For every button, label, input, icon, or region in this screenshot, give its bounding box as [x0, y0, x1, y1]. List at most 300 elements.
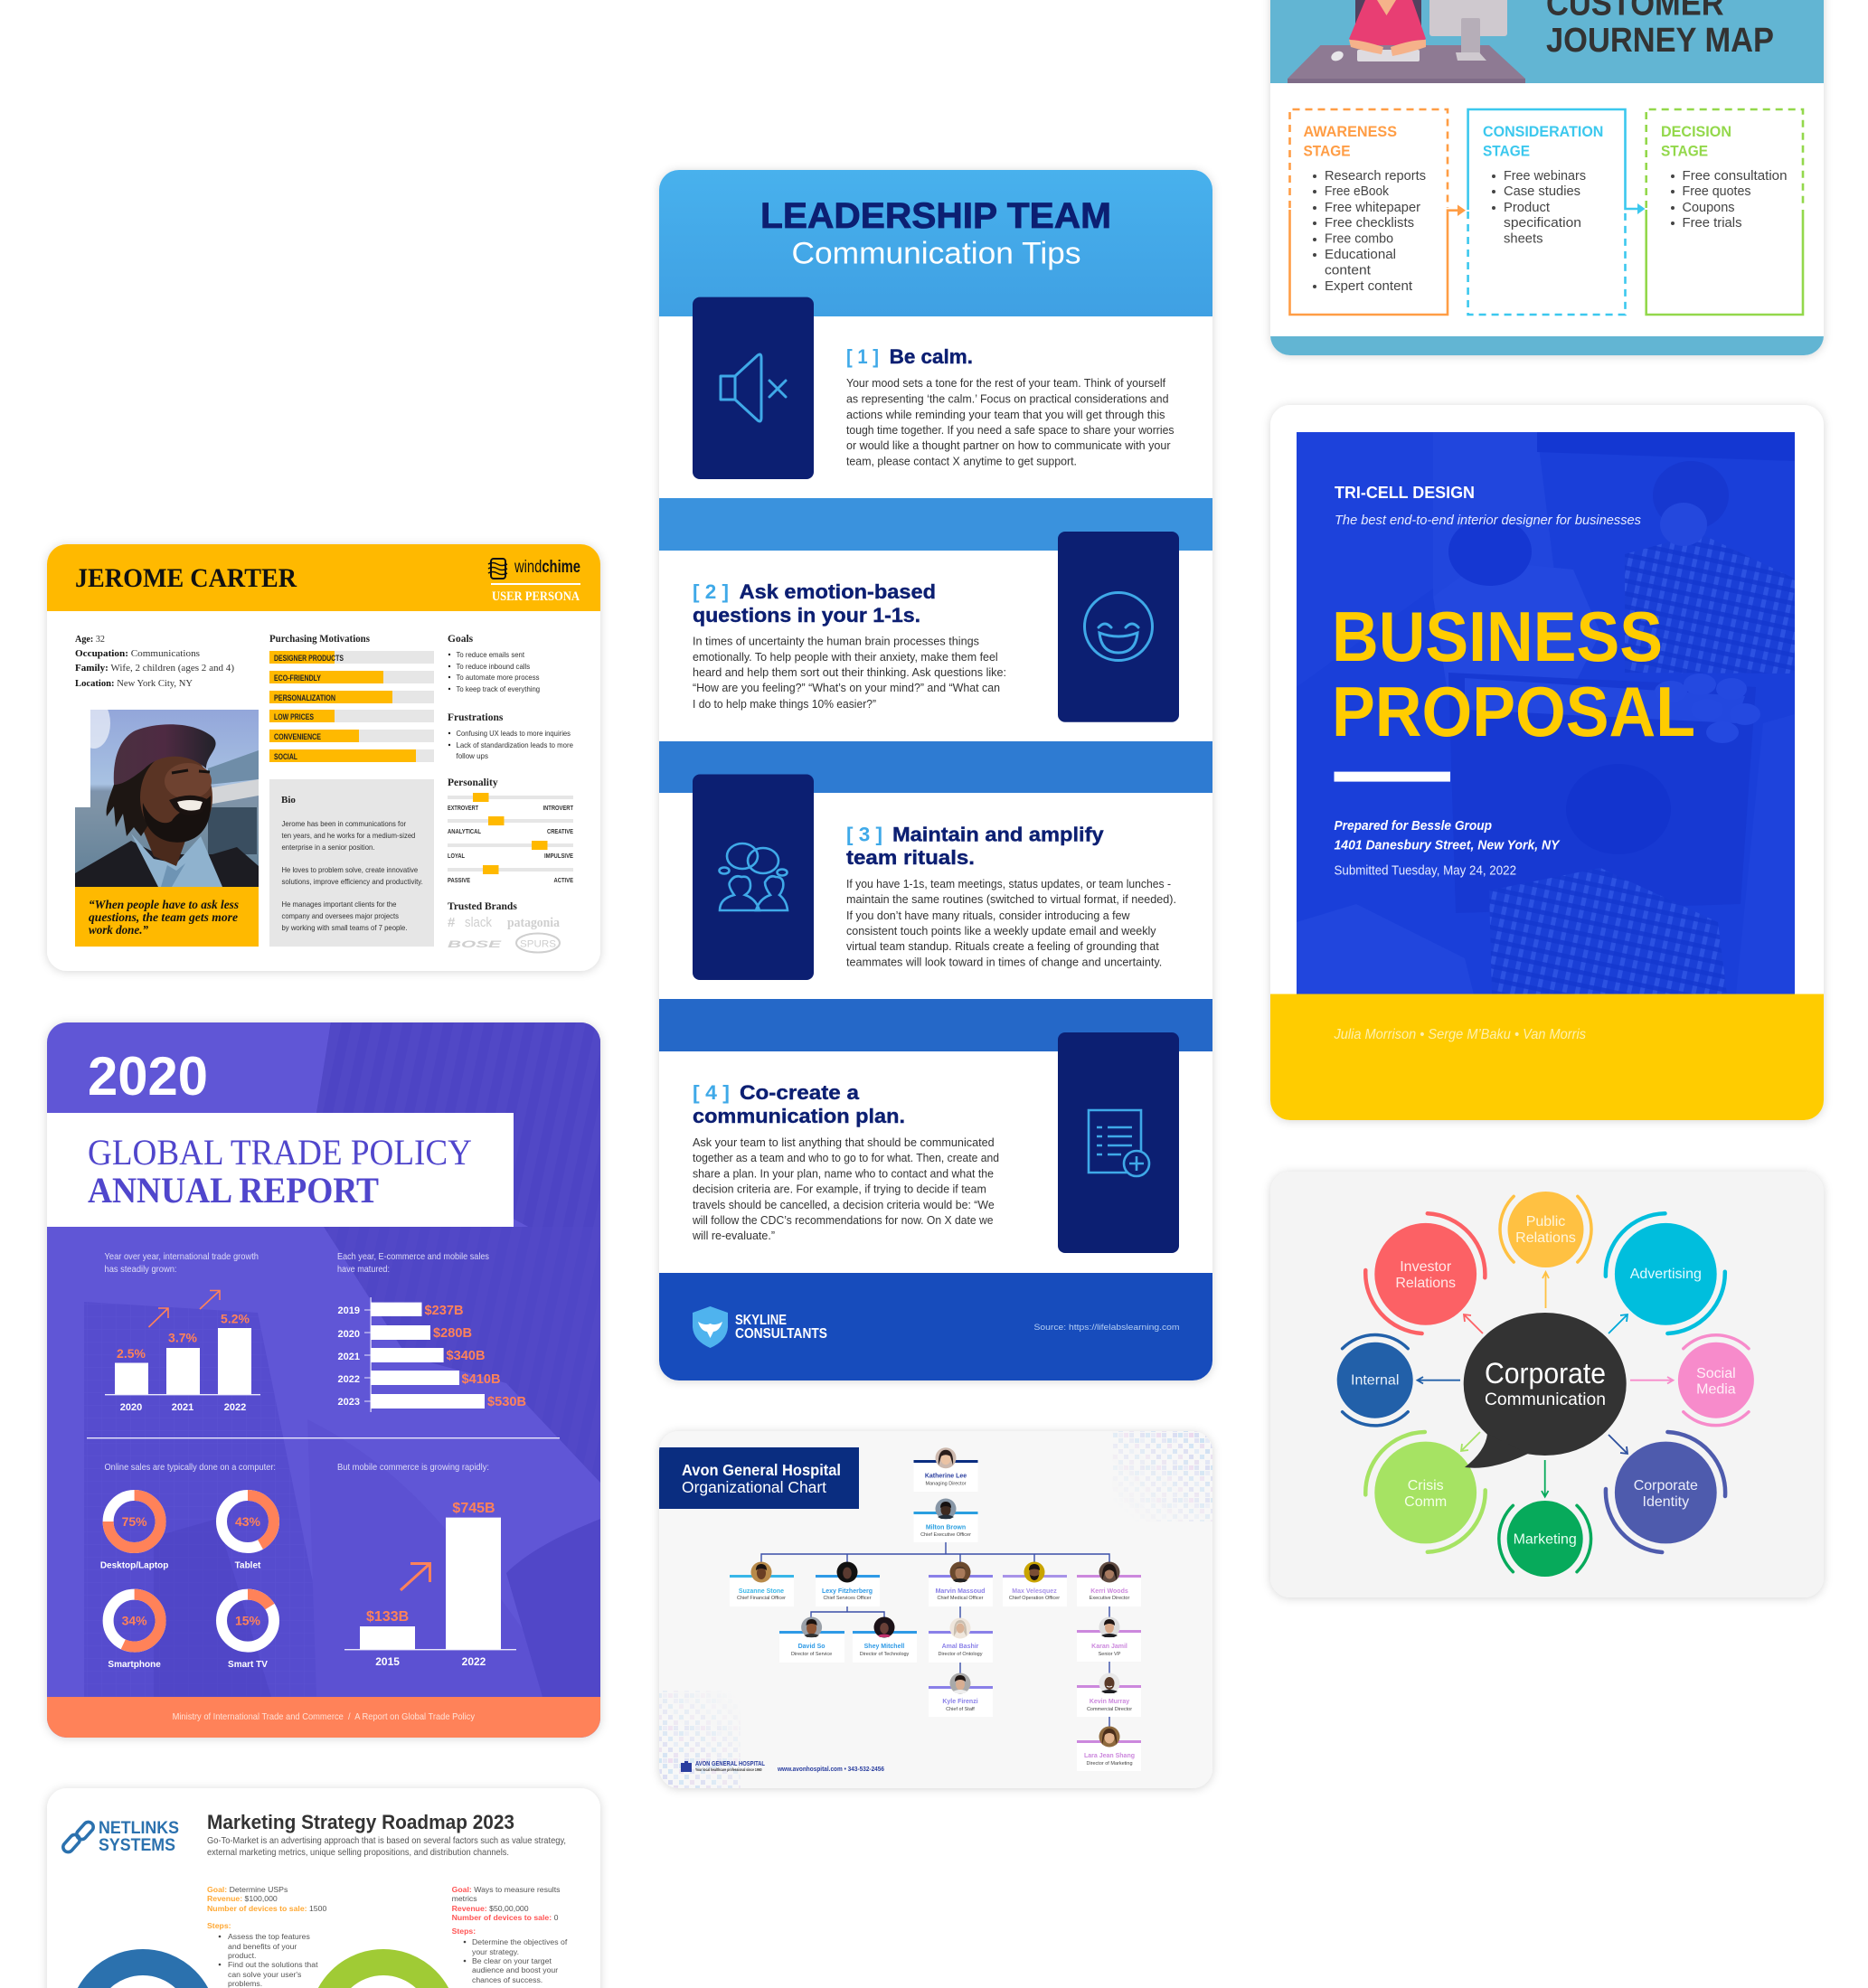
ecommerce horizontal bars: 2023 [338, 1397, 360, 1408]
center speech bubble [1464, 1313, 1627, 1468]
decision stage box: DECISION [1661, 123, 1731, 140]
report title [88, 1132, 472, 1211]
tip 3 icon: people talking [693, 774, 814, 980]
bio panel: solutions, improve efficiency and productivity. [282, 877, 423, 886]
background buildings [84, 1022, 600, 1697]
demographics text: Occupation: Communications [75, 648, 200, 659]
windchime logo [488, 558, 580, 585]
ecommerce horizontal bars [338, 1297, 526, 1412]
person card: Suzanne Stone: Suzanne Stone [739, 1588, 784, 1595]
awareness stage box: content [1325, 264, 1371, 278]
person card: Max Velesquez [1003, 1562, 1067, 1606]
org chart title: Organizational Chart [682, 1478, 826, 1496]
online sales caption: Online sales are typically done on a computer: [105, 1462, 276, 1473]
title: LEADERSHIP TEAM [760, 196, 1111, 236]
mobile commerce bar chart: 2022 [462, 1655, 486, 1668]
trade growth bar chart [105, 1291, 260, 1413]
growth arrows [148, 1291, 220, 1327]
arrows from center to nodes [1418, 1272, 1673, 1497]
report footer [47, 1697, 600, 1738]
person card: Marvin Massoud: Chief Medical Officer [938, 1596, 984, 1601]
trade growth bar chart: 3.7% [168, 1331, 198, 1345]
tip 2 text [693, 580, 1006, 711]
purchasing motivations chart: PERSONALIZATION [274, 693, 335, 702]
panel: customer journey map [1270, 0, 1824, 356]
mobile commerce bar chart: 2015 [375, 1655, 400, 1668]
org chart title: Avon General Hospital [682, 1461, 841, 1479]
roadmap column: measure results [452, 1885, 568, 1984]
bio panel: Bio [281, 795, 296, 806]
ecommerce caption: have matured: [337, 1264, 390, 1275]
decision stage box [1646, 109, 1803, 315]
trade growth caption [105, 1251, 259, 1275]
roadmap column: measure results: metrics [452, 1894, 477, 1903]
goals list [448, 634, 540, 693]
person card: David So [779, 1616, 844, 1663]
ecommerce horizontal bars: $237B [425, 1303, 464, 1318]
roadmap description: external marketing metrics, unique selling propositions, and distribution channels. [207, 1847, 509, 1858]
tip 3 text: If you have 1-1s, team meetings, status updates, or team lunches - [846, 878, 1171, 890]
person card: Kevin Murray: Commercial Director [1087, 1707, 1132, 1712]
consideration stage box: specification [1504, 216, 1581, 231]
prepared for details: Prepared for Bessle Group [1335, 819, 1492, 834]
tip 3 text: teammates will look toward in times of change and uncertainty. [846, 956, 1162, 969]
consideration stage box: Free webinars [1504, 169, 1586, 184]
person card: Suzanne Stone: Chief Financial Officer [737, 1596, 786, 1601]
hat [114, 724, 216, 785]
node: public relations: Public [1526, 1214, 1565, 1230]
person card: Milton Brown: Milton Brown [926, 1525, 966, 1531]
personality sliders: LOYAL [448, 852, 465, 860]
title band [659, 1447, 859, 1509]
tip 3 text: maintain the same routines (switched to virtual format, if needed). [846, 893, 1176, 906]
node: corporate identity: Identity [1643, 1494, 1689, 1510]
roadmap column: determine USPs: and benefits of your [228, 1942, 297, 1951]
purchasing motivations chart: DESIGNER PRODUCTS [274, 654, 344, 663]
user persona label: USER PERSONA [492, 589, 580, 604]
donut: smartphone [108, 1595, 161, 1670]
report title: GLOBAL TRADE POLICY [88, 1132, 472, 1173]
awareness stage box: STAGE [1304, 143, 1351, 160]
donut: smartphone: Smartphone [108, 1660, 161, 1670]
node: marketing: Marketing [1514, 1532, 1577, 1548]
person card: Karan Jamil: Senior VP [1099, 1652, 1121, 1657]
tip 4 text [692, 1081, 999, 1242]
awareness stage box: Expert content [1325, 279, 1412, 294]
tagline: The best end-to-end interior designer for businesses [1335, 513, 1641, 528]
quote box [75, 887, 259, 947]
netlinks logo: NETLINKS [99, 1819, 179, 1838]
mobile growth arrow [401, 1564, 430, 1590]
frustrations list: Lack of standardization leads to more [456, 740, 573, 749]
consideration stage box: CONSIDERATION [1483, 123, 1603, 140]
trusted brands: SPURS [520, 938, 556, 949]
ecommerce horizontal bars: 2019 [338, 1305, 360, 1316]
tip 1 icon: muted speaker [693, 297, 814, 479]
decision stage box: Free quotes [1682, 184, 1750, 199]
panel: business proposal [1270, 405, 1824, 1121]
person card: Max Velesquez: Chief Operation Officer [1009, 1596, 1060, 1601]
tip 2 text: “How are you feeling?” “What’s on your mind?” and “What can [693, 682, 1000, 694]
tip 2 icon: smiling face [1058, 532, 1179, 722]
personality sliders: EXTROVERT [448, 804, 478, 812]
yellow footer band [1270, 994, 1824, 1121]
roadmap column: measure results: your strategy. [472, 1947, 519, 1956]
roadmap column: measure results: Goal: Ways to measure results [452, 1885, 561, 1894]
goals list: Goals [448, 634, 474, 645]
proposal title [1332, 597, 1695, 751]
person card: Lara Jean Shang [1077, 1727, 1141, 1771]
node: corporate identity: Corporate [1634, 1478, 1698, 1493]
title band [47, 1113, 514, 1227]
person card: Suzanne Stone [730, 1562, 794, 1606]
mobile commerce bar chart: $133B [366, 1609, 409, 1625]
tip 4 text: Co-create a [740, 1081, 860, 1104]
subtitle: Communication Tips [792, 237, 1081, 271]
bio panel: company and oversees major projects [282, 911, 399, 920]
donut: desktop/laptop: 75% [122, 1514, 147, 1529]
donut: smartphone: 34% [122, 1614, 147, 1628]
roadmap column: determine USPs: problems. [228, 1979, 262, 1988]
header band [1270, 0, 1824, 83]
tip 1 text: or would like a thought partner on how to communicate with your [846, 439, 1170, 452]
illustration: person at desk [1288, 0, 1525, 83]
neck [144, 826, 185, 866]
hospital logo and contact: www.avonhospital.com • 343-532-2456 [777, 1767, 884, 1773]
purchasing motivations chart: Purchasing Motivations [269, 634, 370, 645]
donut: smart TV [222, 1595, 274, 1670]
person card: Karan Jamil: Karan Jamil [1091, 1644, 1127, 1650]
trusted brands [448, 901, 560, 953]
frustrations list: Confusing UX leads to more inquiries [456, 729, 571, 738]
roadmap description [207, 1835, 566, 1858]
panel: leadership team communication tips [659, 170, 1212, 1381]
roadmap column: determine USPs: Assess the top features [228, 1932, 310, 1941]
node: investor relations: Relations [1395, 1276, 1456, 1291]
hospital logo and contact: Your local healthcare professional since 1960 [695, 1767, 762, 1772]
roadmap column: determine USPs: Goal: Determine USPs [207, 1885, 288, 1894]
tip 3 text: team rituals. [846, 846, 975, 869]
frustrations list [448, 712, 573, 760]
person card: Kerri Woods: Executive Director [1090, 1596, 1129, 1601]
node: advertising [1606, 1213, 1725, 1333]
person card: Kerri Woods: Kerri Woods [1090, 1588, 1128, 1595]
mobile commerce bar chart: $745B [452, 1501, 495, 1516]
roadmap column: measure results: Number of devices to sale: 0 [452, 1913, 559, 1922]
trusted brands: BOSE [448, 939, 502, 950]
person card: Shey Mitchell [853, 1616, 917, 1663]
tip 1 text: [ 1 ] [846, 345, 879, 368]
portrait photo [75, 698, 259, 887]
ecommerce horizontal bars: $530B [487, 1394, 526, 1409]
proposal title: BUSINESS [1332, 597, 1663, 676]
company name: TRI-CELL DESIGN [1335, 484, 1475, 502]
trade growth bar chart: 2.5% [117, 1346, 146, 1361]
ecommerce caption [337, 1251, 489, 1275]
tip 4 text: communication plan. [693, 1105, 905, 1127]
consideration stage box: Case studies [1504, 184, 1580, 199]
tip 2 text: I do to help make things 10% easier?” [693, 698, 876, 711]
node: corporate identity [1606, 1432, 1725, 1552]
leadership footer: Source: https://lifelabslearning.com [1034, 1323, 1180, 1333]
journey map title [1546, 0, 1774, 60]
awareness stage box: Educational [1325, 248, 1396, 262]
bio panel: He loves to problem solve, create innovative [282, 865, 418, 874]
goals list: To keep track of everything [456, 684, 540, 693]
decision stage box: Coupons [1682, 201, 1734, 215]
tip 4 text: Ask your team to list anything that should be communicated [693, 1136, 995, 1149]
node: marketing [1499, 1501, 1591, 1577]
demographics text: Age: 32 [75, 634, 105, 645]
tip 4 text: will re-evaluate.” [692, 1230, 775, 1242]
tip 4 text: [ 4 ] [693, 1081, 730, 1104]
tip 1 text: as representing ‘the calm.’ Focus on practical considerations and [846, 393, 1169, 406]
trusted brands: slack [465, 915, 492, 930]
trade growth bar chart: 2020 [120, 1402, 142, 1413]
blue ring [81, 1962, 204, 1988]
panel: Avon General Hospital org chart [659, 1431, 1212, 1788]
bio panel: Jerome has been in communications for [282, 819, 406, 828]
tip 4 text: share a plan. In your plan, name who to contact and what the [693, 1168, 994, 1181]
trusted brands: # [448, 915, 456, 930]
consideration stage box [1468, 109, 1646, 315]
donut: smart TV: 15% [235, 1614, 261, 1628]
ecommerce horizontal bars: 2022 [338, 1374, 360, 1385]
tip 4 text: travels should be cancelled, a decision criteria would be: “We [693, 1199, 995, 1211]
personality sliders: IMPULSIVE [544, 852, 573, 860]
donut: desktop/laptop [100, 1495, 168, 1571]
node: investor relations: Investor [1400, 1259, 1452, 1275]
leadership footer: SKYLINE [735, 1313, 787, 1328]
trusted brands: Trusted Brands [448, 901, 517, 912]
report footer: Ministry of International Trade and Commerce / A Report on Global Trade Policy [173, 1711, 476, 1722]
tip 3 text: Maintain and amplify [892, 824, 1104, 846]
node: investor relations [1365, 1213, 1485, 1333]
node: social media: Media [1696, 1382, 1736, 1398]
person card: Lexy Fitzherberg: Chief Services Officer [823, 1596, 872, 1601]
person card: Kerri Woods [1077, 1562, 1141, 1606]
person card: Milton Brown: Chief Executive Officer [920, 1532, 971, 1538]
node: crisis comm: Crisis [1408, 1478, 1444, 1493]
person card: Kevin Murray [1077, 1672, 1141, 1717]
tip 2 text: Ask emotion-based [740, 580, 936, 603]
tip 4 icon: document plus [1058, 1032, 1179, 1253]
roadmap column: measure results: Revenue: $50,00,000 [452, 1904, 529, 1913]
roadmap column: determine USPs: Steps: [207, 1921, 231, 1930]
personality sliders: CREATIVE [547, 827, 573, 835]
roadmap column: determine USPs: Number of devices to sale: 1500 [207, 1904, 326, 1913]
tip 1 text: team, please contact X anytime to get support. [846, 456, 1077, 468]
person card: Milton Brown [913, 1499, 978, 1542]
trusted brands: patagonia [507, 916, 560, 930]
node: crisis comm: Comm [1404, 1494, 1447, 1510]
trade growth bar chart: 2022 [224, 1402, 246, 1413]
tip 2 text: heard and help them sort out their thinking. Ask questions like: [693, 666, 1006, 679]
journey map title: JOURNEY MAP [1546, 22, 1774, 60]
mobile commerce bar chart [344, 1501, 516, 1668]
prepared for details: 1401 Danesbury Street, New York, NY [1335, 838, 1561, 853]
hospital logo and contact: AVON GENERAL HOSPITAL [695, 1759, 765, 1767]
personality sliders: Personality [448, 777, 498, 788]
person card: Shey Mitchell: Shey Mitchell [864, 1644, 904, 1650]
prepared for details [1335, 819, 1561, 879]
bio panel: ten years, and he works for a medium-sized [282, 831, 416, 840]
node: public relations: Relations [1515, 1230, 1576, 1246]
personality sliders: ACTIVE [553, 876, 573, 884]
decision stage box: Free trials [1682, 216, 1741, 231]
frustrations list: follow ups [456, 751, 488, 760]
demographics text: Family: Wife, 2 children (ages 2 and 4) [75, 663, 234, 674]
persona quote: questions, the team gets more [89, 911, 238, 925]
donut: smart TV: Smart TV [228, 1660, 268, 1670]
tip 4 text: will follow the CDC’s recommendations for now. On X date we [692, 1214, 994, 1227]
person card: Amal Bashir: Amal Bashir [942, 1644, 979, 1650]
ecommerce horizontal bars: $410B [461, 1371, 501, 1387]
personality sliders [448, 777, 573, 884]
roadmap column: determine USPs: Find out the solutions that [228, 1960, 318, 1969]
prepared for details: Submitted Tuesday, May 24, 2022 [1335, 864, 1516, 879]
personality sliders: PASSIVE [448, 876, 470, 884]
panel: global trade policy annual report [47, 1022, 600, 1738]
tip 1 text: tough time together. If you need a safe space to share your worries [846, 424, 1174, 437]
person card: Lexy Fitzherberg: Lexy Fitzherberg [822, 1588, 873, 1595]
purchasing motivations chart: SOCIAL [274, 752, 297, 761]
trade growth bar chart: 2021 [172, 1402, 193, 1413]
node: social media [1678, 1335, 1754, 1426]
org chart title [682, 1461, 841, 1496]
skyline shield logo [693, 1306, 728, 1348]
person card: Marvin Massoud: Marvin Massoud [936, 1588, 985, 1595]
ecommerce horizontal bars: $340B [447, 1348, 486, 1363]
roadmap column: determine USPs: Revenue: $100,000 [207, 1894, 278, 1903]
center speech bubble: Corporate [1485, 1357, 1606, 1390]
person card: Amal Bashir: Director of Ontology [939, 1652, 983, 1657]
bio panel [269, 779, 434, 947]
awareness stage box: Research reports [1325, 169, 1426, 184]
leadership footer [659, 1273, 1212, 1381]
person card: Lara Jean Shang: Director of Marketing [1086, 1761, 1133, 1767]
decision stage box: Free consultation [1682, 169, 1787, 184]
consideration stage box: STAGE [1483, 143, 1530, 160]
person card: Kevin Murray: Kevin Murray [1090, 1699, 1129, 1705]
personality sliders: INTROVERT [542, 804, 573, 812]
band 2 [659, 498, 1212, 551]
donut: desktop/laptop: Desktop/Laptop [100, 1560, 168, 1571]
person card: David So: David So [798, 1644, 826, 1650]
purchasing motivations chart [269, 634, 434, 762]
purchasing motivations chart: LOW PRICES [274, 712, 314, 721]
beard [143, 796, 211, 843]
tip 4 text: together as a team and who to go to for what. Then, create and [693, 1152, 999, 1164]
proposal title: PROPOSAL [1332, 672, 1695, 751]
roadmap column: determine USPs [207, 1885, 326, 1988]
goals list: To reduce inbound calls [456, 662, 530, 671]
decision stage box: STAGE [1661, 143, 1708, 160]
donut: tablet: Tablet [235, 1560, 261, 1571]
trade growth caption: has steadily grown: [105, 1264, 177, 1275]
year heading: 2020 [88, 1046, 208, 1107]
roadmap column: measure results: Determine the objectives of [472, 1937, 568, 1946]
person card: Kyle Firenzi [929, 1672, 993, 1717]
node: advertising: Advertising [1630, 1267, 1702, 1282]
person card: Katherine Lee: Managing Director [926, 1481, 967, 1486]
awareness stage box: Free checklists [1325, 216, 1414, 231]
tip 3 text [846, 824, 1176, 969]
awareness stage box: Free eBook [1325, 184, 1390, 199]
persona quote: “When people have to ask less [89, 899, 240, 912]
purchasing motivations chart: ECO-FRIENDLY [274, 674, 321, 683]
center speech bubble: Communication [1485, 1390, 1606, 1409]
person card: Shey Mitchell: Director of Technology [860, 1652, 910, 1657]
person card: Karan Jamil [1077, 1616, 1141, 1662]
demographics text: Location: New York City, NY [75, 678, 193, 689]
connector lines [761, 1542, 1109, 1728]
node: social media: Social [1696, 1366, 1736, 1381]
bottom band [1270, 336, 1824, 356]
goals list: To reduce emails sent [456, 650, 525, 659]
jacket [75, 841, 259, 887]
tip 2 text: questions in your 1-1s. [693, 604, 920, 627]
ecommerce horizontal bars: $280B [433, 1325, 472, 1341]
goals list: To automate more process [456, 673, 539, 682]
tip 3 text: If you don’t have many rituals, consider introducing a few [846, 909, 1130, 922]
ecommerce horizontal bars: 2020 [338, 1329, 360, 1340]
roadmap column: measure results: audience and boost your [472, 1965, 558, 1974]
donut: tablet [222, 1495, 274, 1571]
awareness stage box: AWARENESS [1304, 123, 1397, 140]
roadmap description: Go-To-Market is an advertising approach that is based on several factors such as value strategy, [207, 1835, 566, 1846]
denim shirt [131, 834, 222, 887]
tip 2 text: In times of uncertainty the human brain processes things [693, 636, 979, 648]
tip 3 text: consistent touch points like a weekly update email and weekly [846, 925, 1156, 937]
trade growth caption: Year over year, international trade growth [105, 1251, 259, 1262]
person card: David So: Director of Service [791, 1652, 832, 1657]
report title: ANNUAL REPORT [88, 1170, 379, 1211]
awareness stage box [1289, 109, 1466, 315]
green ring [322, 1962, 445, 1988]
roadmap column: measure results: chances of success. [472, 1975, 542, 1984]
tip 1 text: Be calm. [890, 345, 973, 368]
roadmap column: determine USPs: can solve your user's [228, 1970, 302, 1979]
node: internal: Internal [1351, 1373, 1399, 1389]
header band [659, 170, 1212, 316]
persona name: JEROME CARTER [75, 563, 297, 593]
person card: Lexy Fitzherberg [816, 1562, 880, 1606]
tip 2 text: [ 2 ] [693, 580, 729, 603]
tip 2 text: emotionally. To help people with their anxiety, make them feel [693, 651, 998, 664]
demographics text [75, 634, 234, 689]
netlinks logo: SYSTEMS [99, 1836, 175, 1855]
band 4 [659, 999, 1212, 1051]
hospital logo and contact [681, 1759, 884, 1773]
node: internal [1337, 1335, 1413, 1426]
person card: Katherine Lee [913, 1447, 978, 1492]
awareness stage box: Free combo [1325, 232, 1393, 247]
roadmap column: determine USPs: product. [228, 1951, 256, 1960]
panel: marketing strategy roadmap [47, 1788, 600, 1988]
panel: corporate communication diagram [1270, 1172, 1824, 1597]
netlinks logo [61, 1819, 179, 1855]
person card: Lara Jean Shang: Lara Jean Shang [1084, 1753, 1135, 1759]
person card: Amal Bashir [929, 1618, 993, 1663]
node: crisis comm [1365, 1432, 1486, 1552]
mobile commerce caption: But mobile commerce is growing rapidly: [337, 1462, 489, 1473]
donut: tablet: 43% [235, 1514, 261, 1529]
person card: Max Velesquez: Max Velesquez [1012, 1588, 1057, 1595]
hair [107, 759, 158, 836]
ecommerce horizontal bars: 2021 [338, 1352, 360, 1362]
leadership footer: CONSULTANTS [735, 1326, 827, 1342]
